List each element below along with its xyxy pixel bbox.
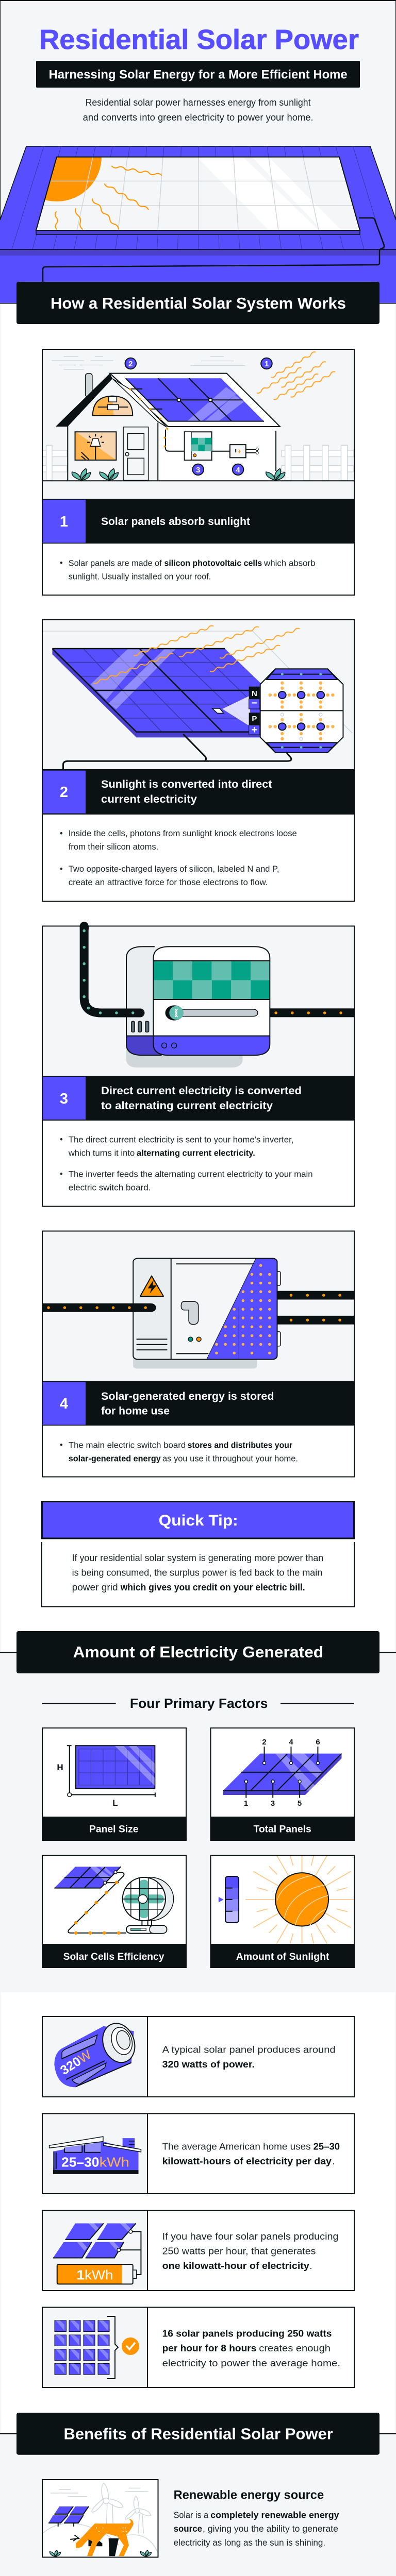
- icon: home: kWh: [100, 2155, 129, 2170]
- icon: battery cylinder: [54, 2021, 139, 2087]
- fact text: electricity to power the average home.: [162, 2358, 340, 2368]
- body: step 3: [60, 1135, 313, 1192]
- fact text: .: [309, 2261, 312, 2271]
- cable: [80, 926, 140, 1013]
- silicon cell cross-section: [260, 669, 343, 753]
- fact text: [162, 2231, 339, 2271]
- number markers: [125, 358, 272, 475]
- icon: sixteen panels and checkmark: [55, 2316, 139, 2379]
- icon: six panels: [223, 1747, 341, 1798]
- card: panel size: Panel Size: [89, 1824, 139, 1835]
- body: step 1: •: [60, 558, 63, 568]
- warning sign: [140, 1276, 163, 1296]
- body: step 4: stores and distributes your: [188, 1441, 293, 1450]
- header: step 2: Sunlight is converted into direct: [101, 778, 272, 790]
- fact text: [162, 2142, 340, 2166]
- section heading: benefits: Benefits of Residential Solar Power: [64, 2425, 333, 2443]
- intro text: Residential solar power harnesses energy from sunlight: [86, 97, 311, 108]
- icon: battery cylinder: 320W: [58, 2047, 94, 2078]
- subtitle banner: Harnessing Solar Energy for a More Efficient Home: [49, 68, 348, 81]
- header: step 2: 2: [60, 784, 68, 801]
- fact text: 320 watts of power.: [162, 2059, 255, 2070]
- benefit text: completely renewable energy: [210, 2510, 339, 2520]
- body: step 2: Inside the cells, photons from sunlight knock electrons loose: [69, 829, 297, 838]
- magnified spot: [212, 696, 250, 726]
- cable: [43, 218, 384, 282]
- header: step 3: [42, 1076, 354, 1121]
- sun rays: [55, 166, 161, 229]
- panel numbers: 3: [271, 1799, 275, 1808]
- attic with ceiling fan: [93, 396, 133, 416]
- panel numbers: 2: [262, 1738, 267, 1747]
- left cable: [42, 1303, 156, 1312]
- subheading: four primary factors: Four Primary Factors: [130, 1696, 268, 1711]
- body: step 1: which absorb: [263, 558, 316, 568]
- illustration: house with solar panels: [42, 357, 354, 481]
- icon: panel dimensions: [67, 1745, 155, 1797]
- body: step 2: •: [60, 829, 63, 838]
- body: step 3: electric switch board.: [69, 1183, 151, 1192]
- fact text: per hour for 8 hours: [162, 2343, 256, 2353]
- sun rays: [257, 352, 335, 399]
- fact text: The average American home uses: [162, 2142, 311, 2152]
- panel numbers: 4: [289, 1738, 293, 1747]
- icon: panel powering a fan: [54, 1867, 174, 1934]
- body: step 2: from their silicon atoms.: [69, 842, 158, 852]
- header: step 4: [42, 1381, 354, 1426]
- body: step 2: •: [60, 865, 63, 874]
- body: step 3: •: [60, 1135, 63, 1144]
- polarity labels: +: [252, 724, 257, 736]
- polarity labels: N: [252, 689, 257, 698]
- header: step 4: Solar-generated energy is stored: [101, 1390, 274, 1402]
- body: step 2: Two opposite-charged layers of silicon, labeled N and P,: [69, 865, 279, 874]
- fact text: 25–30: [314, 2142, 340, 2152]
- inverter panel: [185, 432, 212, 460]
- fact: 16 panels: [42, 2307, 354, 2387]
- benefit text: Renewable energy source: [174, 2488, 324, 2502]
- panel numbers: 1: [244, 1799, 248, 1808]
- header: step 4: 4: [60, 1396, 68, 1412]
- fact text: 16 solar panels producing 250 watts: [162, 2329, 332, 2339]
- header: step 3: Direct current electricity is converted: [101, 1084, 302, 1097]
- fact text: [162, 2044, 336, 2070]
- illustration: inverter: [80, 926, 354, 1067]
- door: [123, 427, 148, 480]
- slider: [165, 1005, 258, 1021]
- fact text: [162, 2329, 340, 2368]
- panel: step 3: [42, 926, 354, 1207]
- N and P tabs: [249, 687, 260, 735]
- benefit text: [174, 2488, 339, 2548]
- fact: 25-30 kWh: [42, 2113, 354, 2194]
- callout: quick tip: is being consumed, the surplus power is fed back to the main: [72, 1568, 322, 1578]
- polarity labels: −: [252, 698, 257, 709]
- card: solar cells efficiency: [42, 1855, 186, 1968]
- intro text: and converts into green electricity to power your home.: [83, 112, 314, 123]
- illustration: solar panel and silicon cell: [52, 649, 343, 769]
- panel numbers: 5: [298, 1799, 302, 1808]
- panel numbers: [244, 1738, 320, 1808]
- section heading: how it works: How a Residential Solar System Works: [51, 294, 346, 312]
- fact text: creates enough: [259, 2343, 331, 2353]
- icon: deer with panels and wind turbines: [42, 2483, 158, 2557]
- body: step 3: which turns it into: [68, 1149, 135, 1158]
- diagram numbers: 2: [128, 360, 133, 368]
- body: step 4: [60, 1440, 298, 1464]
- body: step 1: silicon photovoltaic cells: [164, 558, 262, 568]
- benefit text: source: [174, 2523, 202, 2534]
- panel glass: [35, 157, 361, 235]
- body: step 4: The main electric switch board: [69, 1441, 186, 1450]
- diagram numbers: 1: [265, 360, 269, 368]
- fact text: .: [332, 2156, 335, 2166]
- header: step 4: for home use: [101, 1405, 170, 1417]
- callout: quick tip: which gives you credit on your electric bill.: [120, 1582, 305, 1592]
- section heading: amount of electricity: Amount of Electricity Generated: [73, 1643, 323, 1661]
- header: step 1: 1: [60, 514, 68, 530]
- card: amount of sunlight: Amount of Sunlight: [236, 1951, 329, 1962]
- header: step 3: 3: [60, 1091, 68, 1107]
- body: step 3: The direct current electricity is sent to your home's inverter,: [69, 1136, 293, 1145]
- header: step 3: to alternating current electricity: [101, 1099, 273, 1112]
- card: amount of sunlight: [210, 1855, 354, 1968]
- benefit: renewable energy source: [42, 2480, 339, 2557]
- polarity labels: [252, 689, 257, 736]
- card: panel size: L: [112, 1798, 118, 1808]
- body: step 4: as you use it throughout your home.: [162, 1454, 298, 1464]
- section heading: how it works: [16, 282, 380, 324]
- roof nodes: [177, 398, 212, 402]
- card: total panels: Total Panels: [254, 1824, 311, 1835]
- fact: 320 watts: [42, 2016, 354, 2097]
- diagram numbers: 4: [236, 466, 240, 474]
- body: step 4: •: [60, 1440, 63, 1450]
- cables: [63, 734, 291, 769]
- icon: four panels charging a battery: 1kWh: [76, 2267, 113, 2282]
- panel: step 1: [42, 349, 354, 595]
- fact text: If you have four solar panels producing: [162, 2231, 339, 2242]
- body: step 2: create an attractive force for those electrons to flow.: [69, 878, 268, 887]
- energy dots: [217, 1265, 270, 1353]
- sun rays: [94, 626, 300, 684]
- panel: step 2: [42, 620, 354, 902]
- diagram numbers: 3: [196, 466, 200, 474]
- fact text: A typical solar panel produces around: [162, 2044, 336, 2055]
- section heading: benefits: [16, 2413, 380, 2455]
- fact: 1 kWh: [42, 2210, 354, 2291]
- icon: home: 25–30: [61, 2155, 99, 2170]
- panel: step 4: [42, 1231, 354, 1477]
- header: step 1: [42, 499, 354, 544]
- callout: quick tip: If your residential solar system is generating more power than: [72, 1553, 323, 1563]
- body: step 1: Solar panels are made of: [69, 558, 162, 568]
- diagram numbers: [128, 360, 269, 474]
- icon: home: [50, 2137, 141, 2174]
- body: step 3: •: [60, 1170, 63, 1179]
- plants: [72, 468, 285, 480]
- fact text: kilowatt-hours of electricity per day: [162, 2156, 332, 2166]
- callout: quick tip: power grid: [72, 1582, 118, 1592]
- window with lamp: [75, 432, 116, 460]
- header: step 1: Solar panels absorb sunlight: [101, 515, 250, 528]
- section heading: amount of electricity: [16, 1631, 380, 1673]
- benefit text: Solar is a: [174, 2510, 208, 2520]
- indicator lights: [188, 1337, 201, 1342]
- icon: four panels charging a battery: [53, 2223, 141, 2284]
- body: step 3: The inverter feeds the alternating current electricity to your main: [69, 1170, 313, 1179]
- illustration: switch board: [42, 1258, 354, 1368]
- battery and plug: [230, 445, 258, 457]
- handle: [181, 1301, 199, 1325]
- benefit text: , giving you the ability to generate: [203, 2523, 338, 2534]
- body: step 3: alternating current electricity.: [137, 1149, 255, 1158]
- title: Residential Solar Power: [39, 24, 359, 55]
- card: total panels: [210, 1728, 354, 1840]
- icon: sun and level gauge: [219, 1855, 354, 1944]
- header: step 2: [42, 769, 354, 815]
- hero illustration: roof with solar panel: [0, 146, 396, 304]
- card: panel size: [42, 1728, 186, 1840]
- inverter front: [153, 946, 270, 1055]
- card: solar cells efficiency: Solar Cells Efficiency: [63, 1951, 164, 1962]
- body: step 2: [60, 829, 297, 887]
- fact text: one kilowatt-hour of electricity: [162, 2261, 309, 2271]
- body: step 4: solar-generated energy: [69, 1454, 161, 1464]
- callout: quick tip: [42, 1501, 354, 1606]
- card: panel size: H: [57, 1762, 63, 1772]
- fact text: 250 watts per hour, that generates: [162, 2246, 316, 2257]
- body: step 1: [60, 558, 316, 581]
- subtitle banner: [36, 61, 360, 88]
- panel numbers: 6: [316, 1738, 320, 1747]
- intro text: [83, 97, 314, 123]
- benefit text: electricity as long as the sun is shining.: [174, 2537, 325, 2548]
- body: step 1: sunlight. Usually installed on your roof.: [69, 572, 211, 581]
- header: step 2: current electricity: [101, 793, 197, 805]
- callout: quick tip: Quick Tip:: [159, 1512, 238, 1529]
- polarity labels: P: [252, 715, 257, 723]
